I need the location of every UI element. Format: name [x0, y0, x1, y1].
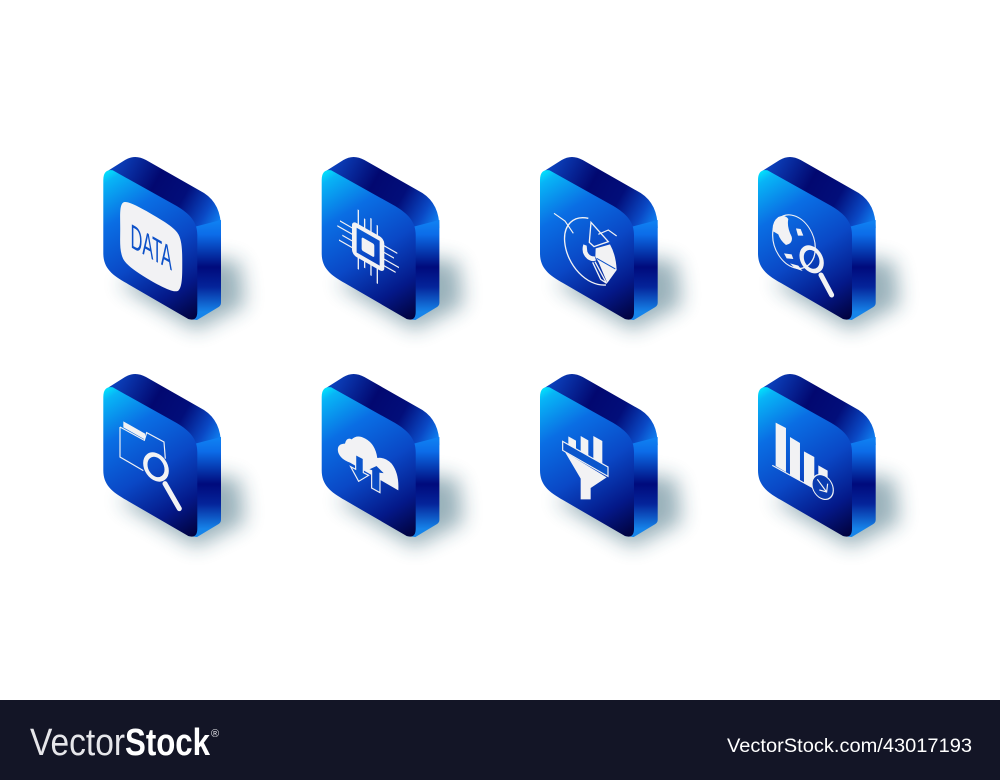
- tile top side: [543, 374, 658, 457]
- tile shadow: [336, 475, 463, 547]
- footer bar: [0, 700, 1000, 780]
- tile shadow: [555, 258, 682, 330]
- tile top side: [106, 157, 221, 240]
- icon: pie chart: [554, 213, 617, 285]
- icon: folder with magnifier: [120, 421, 179, 509]
- tile: data funnel: [540, 374, 682, 547]
- icon: chip: [337, 198, 399, 296]
- tile shadow: [773, 258, 900, 330]
- icon: globe with magnifier: [773, 209, 832, 295]
- tile top side: [761, 157, 876, 240]
- tile right side: [406, 437, 439, 537]
- icon: descending bar chart: [772, 423, 833, 502]
- tile top side: [324, 157, 439, 240]
- tile: data label: [103, 157, 245, 330]
- tile top side: [106, 374, 221, 457]
- tile front face: [322, 387, 416, 537]
- tile front face: [540, 170, 634, 320]
- tile front face: [322, 170, 416, 320]
- tile: falling bars: [758, 374, 900, 547]
- footer logo: Vector: [30, 722, 125, 764]
- tile: folder search: [103, 374, 245, 547]
- tile right side: [843, 437, 876, 537]
- tile front face: [758, 170, 852, 320]
- tile: cloud sync: [322, 374, 463, 547]
- tile top side: [324, 374, 439, 457]
- tile: globe search: [758, 157, 900, 330]
- tile right side: [625, 437, 658, 537]
- tile shadow: [555, 475, 682, 547]
- tile front face: [103, 170, 197, 320]
- tile right side: [188, 220, 221, 320]
- tile front face: [758, 387, 852, 537]
- tile: processor chip: [322, 157, 463, 330]
- footer logo: Stock: [125, 722, 211, 764]
- tile shadow: [118, 475, 245, 547]
- tile: pie chart: [540, 157, 682, 330]
- tile shadow: [773, 475, 900, 547]
- icon: data plate: [120, 196, 182, 299]
- icon: cloud with arrows: [338, 436, 398, 493]
- tile right side: [843, 220, 876, 320]
- tile shadow: [118, 258, 245, 330]
- tile right side: [188, 437, 221, 537]
- icon: data plate: DATA: [131, 216, 172, 278]
- tile right side: [625, 220, 658, 320]
- footer logo: ®: [211, 728, 219, 740]
- tile right side: [406, 220, 439, 320]
- tile shadow: [336, 258, 463, 330]
- icon: funnel with bars: [563, 436, 608, 499]
- tile front face: [103, 387, 197, 537]
- tile top side: [543, 157, 658, 240]
- tile front face: [540, 387, 634, 537]
- tile top side: [761, 374, 876, 457]
- footer image id: VectorStock.com/43017193: [727, 736, 972, 757]
